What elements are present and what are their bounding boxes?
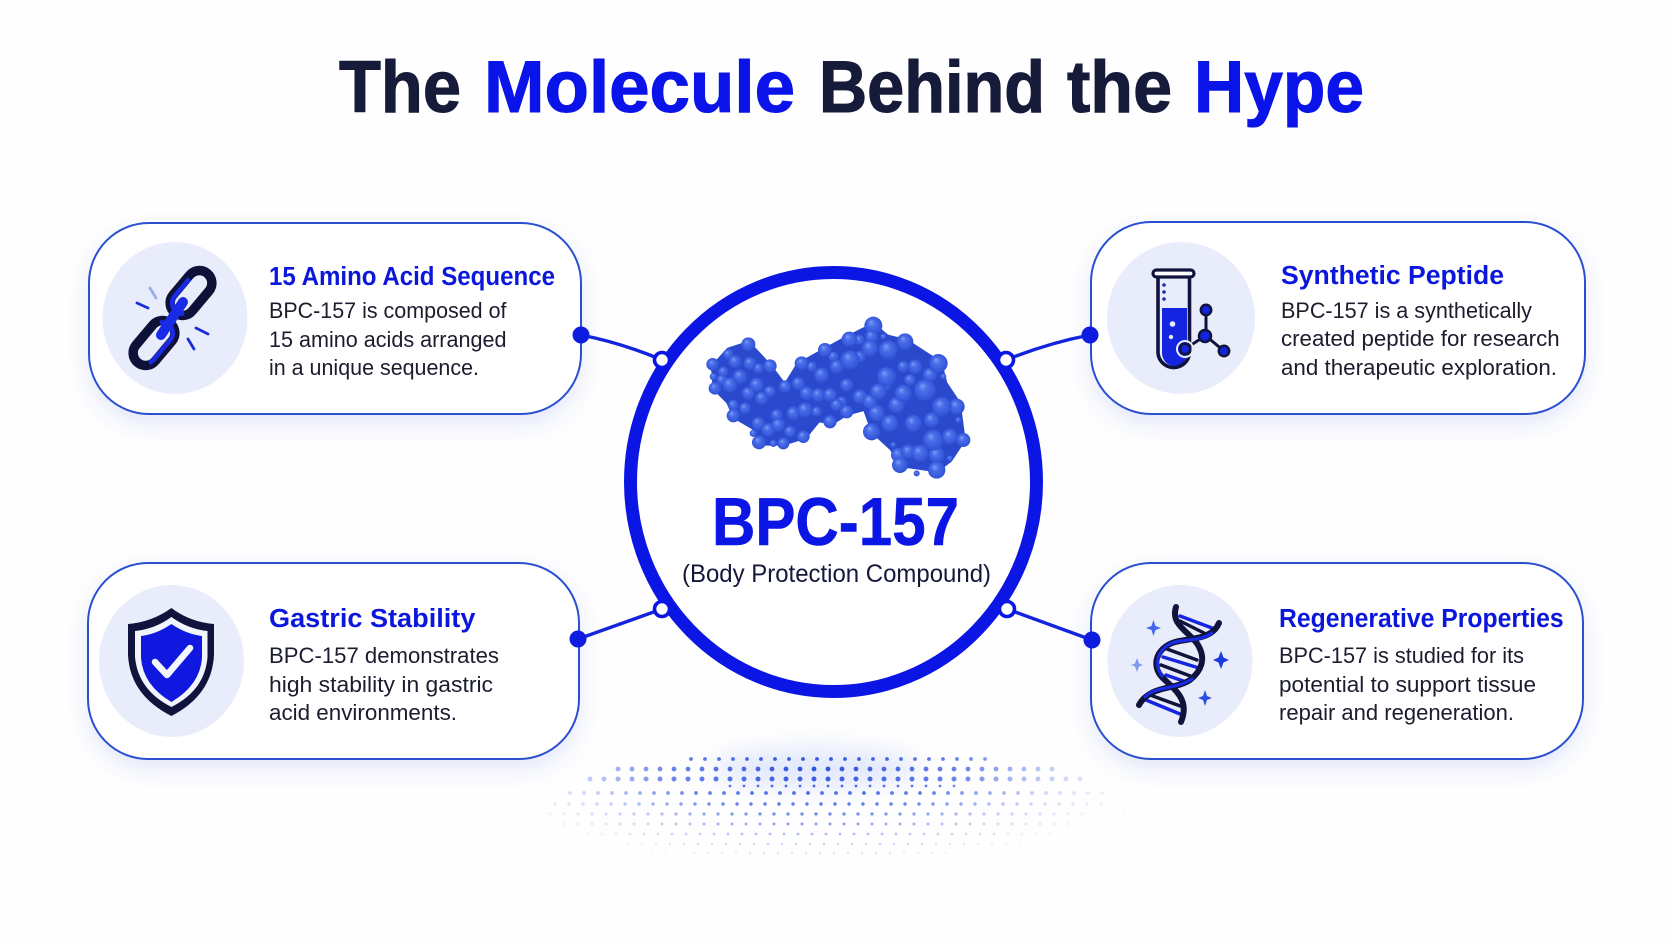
panel: gastric stability xyxy=(88,563,586,759)
text block xyxy=(269,643,499,725)
title: Behind xyxy=(819,47,1045,128)
text block: and therapeutic exploration. xyxy=(1281,355,1557,380)
heading: Gastric Stability xyxy=(269,605,476,633)
text block: created peptide for research xyxy=(1281,326,1560,351)
title: the xyxy=(1067,47,1172,128)
heading: 15 Amino Acid Sequence xyxy=(269,263,555,291)
dot pattern floor xyxy=(550,748,1140,853)
text block: BPC-157 is a synthetically xyxy=(1281,298,1533,323)
icon: dna helix xyxy=(1108,585,1252,737)
icon: test tube with molecule xyxy=(1107,242,1255,394)
molecule illustration xyxy=(706,317,970,479)
panel: 15 amino acid sequence xyxy=(89,223,590,414)
text block: BPC-157 is studied for its xyxy=(1279,643,1524,668)
title xyxy=(339,47,1364,128)
text block: high stability in gastric xyxy=(269,672,493,697)
title: The xyxy=(339,47,461,128)
text block xyxy=(1279,643,1536,725)
text block: BPC-157 demonstrates xyxy=(269,643,499,668)
text block: repair and regeneration. xyxy=(1279,700,1514,725)
heading: Regenerative Properties xyxy=(1279,605,1564,633)
text block: BPC-157 is composed of xyxy=(269,298,507,323)
text block: in a unique sequence. xyxy=(269,355,479,380)
central label: BPC-157: BPC-157 xyxy=(712,484,959,560)
panel: regenerative properties xyxy=(1084,563,1583,759)
panel: synthetic peptide xyxy=(1082,222,1585,414)
text block xyxy=(269,298,507,380)
central sublabel: (Body Protection Compound) xyxy=(682,560,991,588)
text block: 15 amino acids arranged xyxy=(269,327,506,352)
icon: chain link xyxy=(102,242,248,394)
title: Hype xyxy=(1194,47,1364,128)
central ring xyxy=(630,272,1036,692)
title: Molecule xyxy=(484,47,795,128)
text block: acid environments. xyxy=(269,700,457,725)
text block: potential to support tissue xyxy=(1279,672,1536,697)
icon: shield with check xyxy=(99,585,244,737)
heading: Synthetic Peptide xyxy=(1281,262,1504,290)
connectors xyxy=(578,335,1092,640)
text block xyxy=(1281,298,1560,380)
